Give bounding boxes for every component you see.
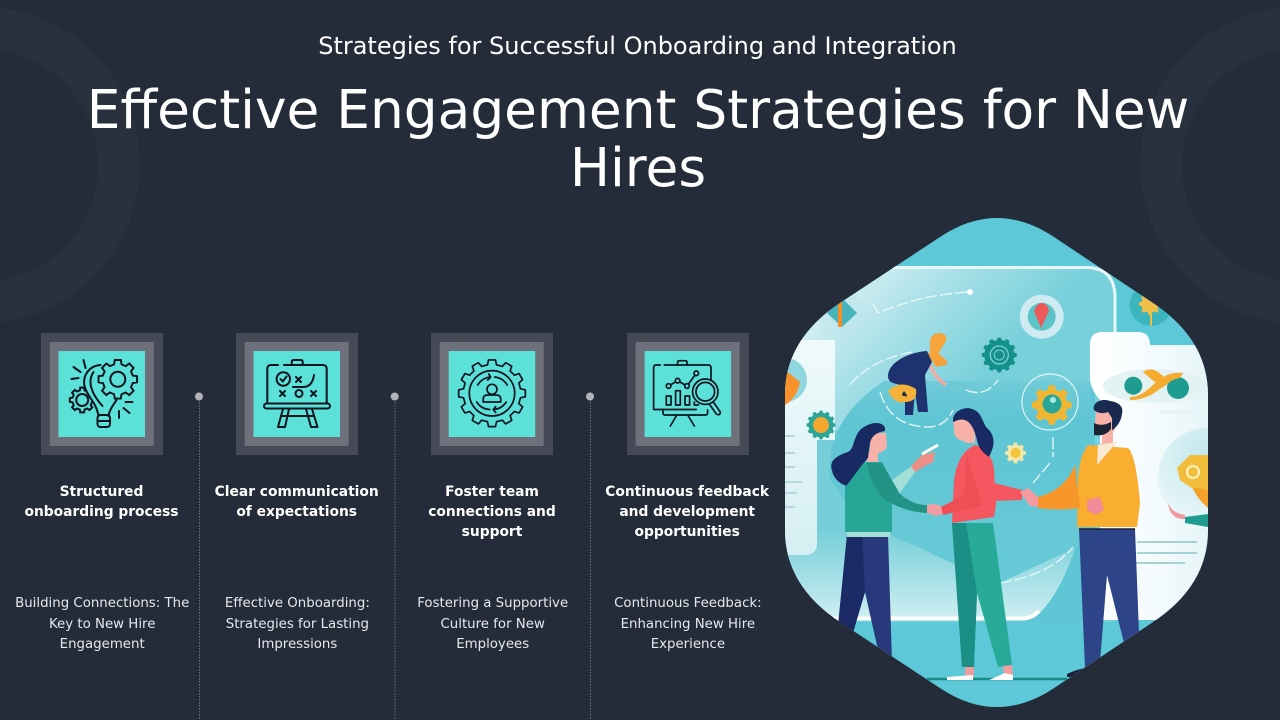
dashed paths [850, 292, 1073, 583]
title [87, 78, 1189, 199]
left pale panel [785, 340, 835, 555]
icon: light bulb with gears [41, 333, 163, 455]
icon: gear with person [431, 333, 553, 455]
icon: small teal gear [807, 411, 835, 439]
illustration: team welcoming new hire in hexagon [785, 218, 1208, 707]
heading: and development [619, 504, 755, 520]
heading: of expectations [236, 504, 357, 520]
man on right [1020, 400, 1140, 677]
heading: onboarding process [24, 504, 178, 520]
icon: red bulb badge [1020, 295, 1064, 339]
heading: support [462, 524, 522, 540]
card 4: continuous feedback and development opportunities [605, 333, 770, 652]
description [15, 596, 189, 652]
description: Effective Onboarding: [225, 596, 370, 611]
heading [605, 484, 770, 540]
subtitle: Strategies for Successful Onboarding and Integration [318, 32, 957, 60]
description: Fostering a Supportive [417, 596, 568, 611]
description: Culture for New [440, 617, 545, 632]
worker figure [888, 333, 948, 415]
heading: Continuous feedback [605, 484, 769, 500]
heading: connections and [428, 504, 556, 520]
card 3: foster team connections and support [417, 333, 568, 652]
icon: presentation board with magnifier [627, 333, 749, 455]
shoes [947, 673, 1013, 680]
heading: opportunities [634, 524, 740, 540]
description: Engagement [60, 637, 145, 652]
icon: yellow gear badge [1022, 374, 1078, 430]
icon: dark teal badge [982, 338, 1017, 372]
heading [215, 484, 379, 520]
icon: strategy board [236, 333, 358, 455]
floor line [927, 678, 1067, 680]
white right panel [1090, 332, 1208, 620]
description: Impressions [257, 637, 337, 652]
icon: infinity swoosh [1124, 370, 1189, 400]
card 2: clear communication of expectations [215, 333, 379, 652]
woman on left [831, 423, 943, 662]
description: Experience [651, 637, 725, 652]
timeline connectors [195, 392, 594, 718]
icon: top-right sun badge [1130, 291, 1169, 326]
description: Enhancing New Hire [621, 617, 755, 632]
heading: Clear communication [215, 484, 379, 500]
description: Strategies for Lasting [226, 617, 369, 632]
title: Effective Engagement Strategies for New [87, 78, 1189, 141]
description: Key to New Hire [49, 617, 155, 632]
icon: small flower [1005, 443, 1026, 463]
description: Building Connections: The [15, 596, 189, 611]
heading [24, 484, 178, 520]
heading: Structured [60, 484, 143, 500]
title: Hires [570, 136, 706, 199]
icon: top-left badge [818, 294, 857, 327]
description [417, 596, 568, 652]
woman in center [941, 408, 1022, 677]
heading: Foster team [445, 484, 539, 500]
card 1: structured onboarding process [15, 333, 189, 652]
description [614, 596, 762, 652]
description: Continuous Feedback: [614, 596, 762, 611]
window panel [785, 266, 1153, 707]
description: Employees [456, 637, 529, 652]
heading [428, 484, 556, 540]
description [225, 596, 370, 652]
